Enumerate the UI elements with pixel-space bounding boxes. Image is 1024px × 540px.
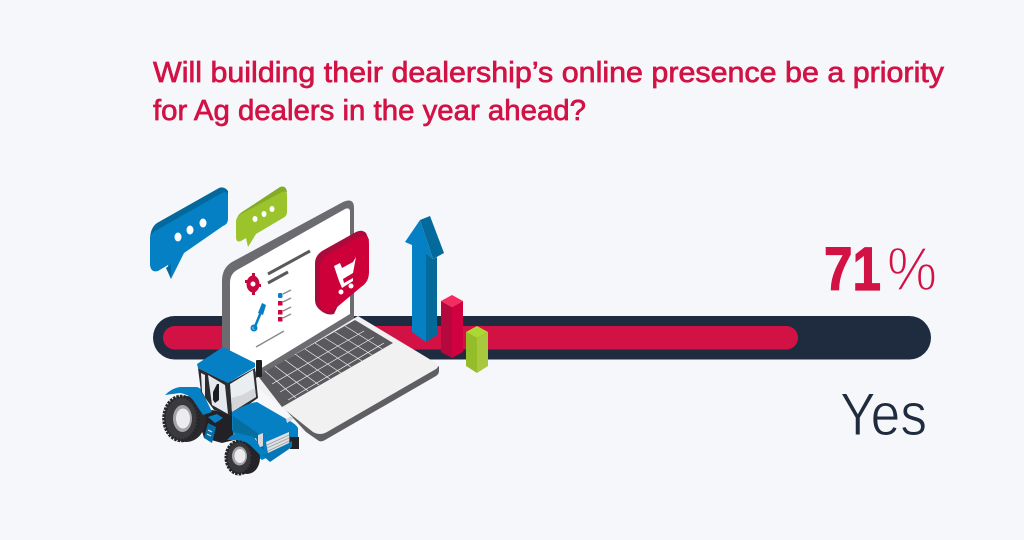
- footstep: [204, 414, 223, 443]
- percentage value: [824, 235, 937, 303]
- title: [153, 57, 945, 127]
- laptop: [222, 200, 439, 441]
- cab roof: [197, 347, 255, 383]
- keyboard: [258, 320, 393, 407]
- headlights: [247, 416, 293, 448]
- cab frame: [198, 368, 258, 416]
- progress bar: [153, 316, 931, 360]
- mirror: [256, 360, 262, 377]
- checklist: [278, 290, 291, 322]
- icon: blue speech bubble: [150, 187, 228, 279]
- percentage value: 71: [824, 235, 881, 303]
- icon: green speech bubble: [236, 187, 287, 247]
- screen footer line: [256, 331, 284, 347]
- rear wheel: [164, 396, 206, 442]
- text lines on screen: [268, 251, 310, 283]
- far front wheel: [290, 437, 299, 449]
- icon: tractor: [164, 347, 299, 474]
- cab windows: [201, 370, 256, 414]
- laptop screen: [222, 200, 354, 396]
- front wheel: [226, 441, 260, 474]
- icon: shopping cart tile: [315, 231, 369, 314]
- chassis: [198, 410, 234, 443]
- laptop base: [250, 316, 439, 441]
- gear icon: [245, 273, 261, 295]
- front fender: [227, 433, 262, 457]
- rear fender: [165, 387, 212, 415]
- front grille: [266, 432, 289, 453]
- icon: red column: [441, 295, 463, 358]
- answer label: Yes: [840, 381, 927, 448]
- percentage value: %: [887, 235, 937, 303]
- title: for Ag dealers in the year ahead?: [153, 95, 586, 127]
- title: Will building their dealership’s online presence be a priority: [153, 57, 945, 89]
- front bumper: [262, 441, 292, 462]
- icon: wrench: [252, 303, 266, 330]
- icon: green column: [466, 326, 488, 373]
- icon: blue up arrow: [405, 216, 444, 342]
- hood: [232, 402, 298, 460]
